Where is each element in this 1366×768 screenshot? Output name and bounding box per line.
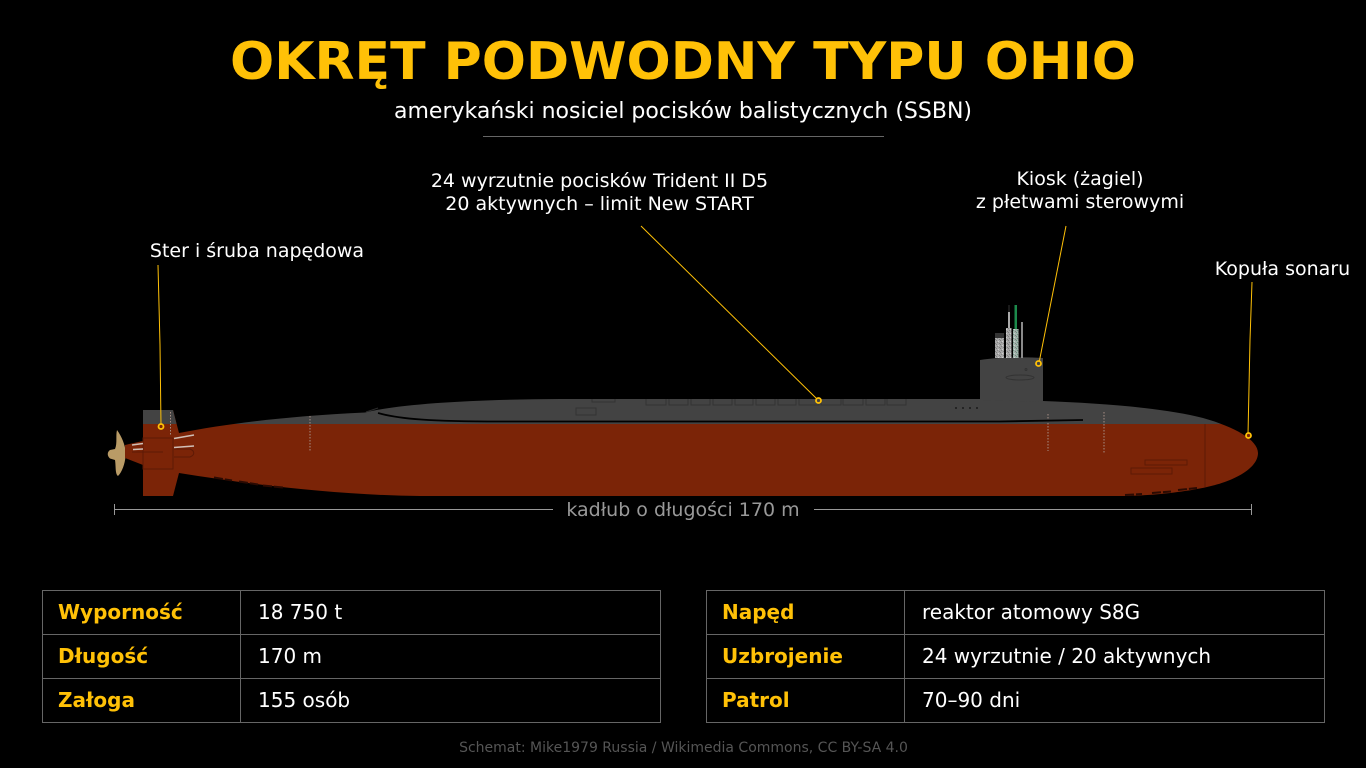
title: OKRĘT PODWODNY TYPU OHIO xyxy=(230,32,1136,92)
table: left specifications: Załoga xyxy=(58,688,135,712)
leader: rudder and propeller xyxy=(158,265,164,429)
label: missile tubes: 24 wyrzutnie pocisków Trident II D5 xyxy=(431,170,768,192)
label: missile tubes: 20 aktywnych – limit New START xyxy=(445,193,754,215)
propeller xyxy=(108,430,126,476)
label: sail: Kiosk (żagiel) xyxy=(1016,168,1144,190)
source credit: Schemat: Mike1979 Russia / Wikimedia Commons, CC BY-SA 4.0 xyxy=(459,740,908,756)
table: left specifications: 170 m xyxy=(258,644,322,668)
submarine schematic xyxy=(100,305,1270,504)
subtitle: amerykański nosiciel pocisków balistycznych (SSBN) xyxy=(394,99,972,124)
keel marks xyxy=(214,478,1197,495)
table: right specifications: Patrol xyxy=(722,688,790,712)
table: right specifications: 70–90 dni xyxy=(922,688,1020,712)
table: left specifications: 18 750 t xyxy=(258,600,342,624)
sail xyxy=(980,357,1043,402)
leader: sail xyxy=(1036,226,1066,366)
table: left specifications: 155 osób xyxy=(258,688,350,712)
deck line xyxy=(378,413,1083,422)
leader: missile tubes xyxy=(641,226,821,403)
dimension line: kadłub o długości 170 m xyxy=(566,499,800,521)
table: right specifications: Uzbrojenie xyxy=(722,644,843,668)
table: left specifications: Długość xyxy=(58,644,148,668)
stern fin xyxy=(143,410,179,496)
table: left specifications: Wyporność xyxy=(58,600,183,624)
label: rudder: Ster i śruba napędowa xyxy=(150,240,364,262)
stern details xyxy=(132,424,1205,487)
missile hatches xyxy=(576,399,906,415)
table: right specifications: reaktor atomowy S8G xyxy=(922,600,1140,624)
dashed frame marks xyxy=(170,412,1104,453)
masts xyxy=(995,337,1004,358)
label: sail: z płetwami sterowymi xyxy=(976,191,1184,213)
sail hull dots xyxy=(955,407,979,409)
planes xyxy=(132,435,194,450)
table: right specifications: Napęd xyxy=(722,600,794,624)
label: sonar dome: Kopuła sonaru xyxy=(1215,258,1350,280)
leader: sonar dome xyxy=(1246,282,1252,438)
table: right specifications: 24 wyrzutnie / 20 aktywnych xyxy=(922,644,1211,668)
table: right specifications xyxy=(706,590,1325,723)
table: left specifications xyxy=(42,590,661,723)
hull xyxy=(125,399,1258,496)
dimension line xyxy=(114,499,1252,521)
